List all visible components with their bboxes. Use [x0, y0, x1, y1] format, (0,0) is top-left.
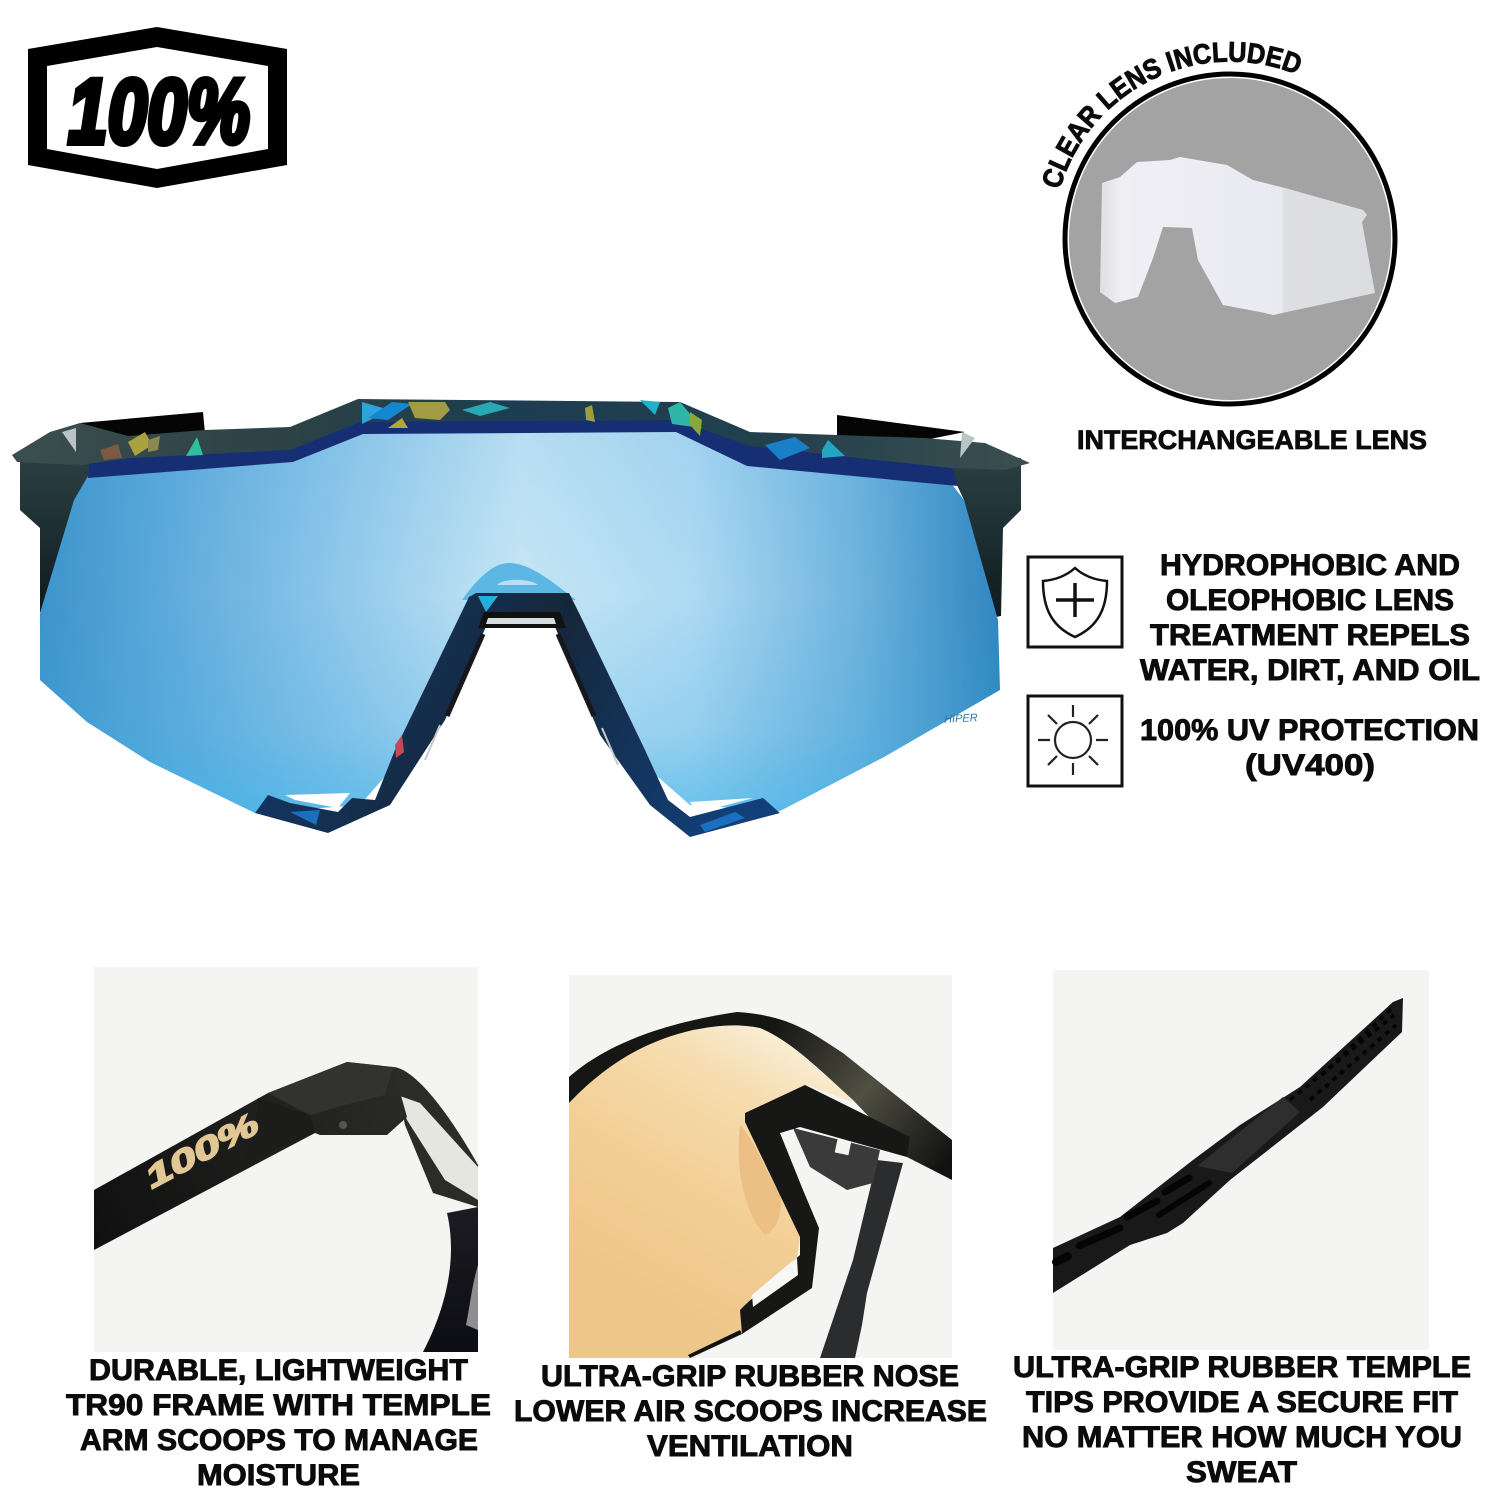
logo: 100% badge [28, 27, 287, 188]
label: interchangeable lens: INTERCHANGEABLE LENS [1077, 425, 1427, 455]
caption: nose: LOWER AIR SCOOPS INCREASE [514, 1395, 987, 1428]
icon: shield with plus [1028, 557, 1122, 647]
nose frame [740, 1085, 910, 1334]
clear lens shape [1100, 157, 1375, 315]
text: lens treatment: TREATMENT REPELS [1150, 619, 1470, 652]
text: uv protection [1140, 714, 1479, 782]
arm logo: 100% [139, 1106, 265, 1195]
text: lens treatment [1140, 549, 1480, 687]
nose piece [255, 593, 780, 837]
caption: frame: MOISTURE [197, 1459, 360, 1492]
top frame [569, 1012, 952, 1180]
caption: temple tips [1013, 1351, 1471, 1489]
caption: temple tips: ULTRA-GRIP RUBBER TEMPLE [1013, 1351, 1471, 1384]
hex grip pattern [1290, 1008, 1396, 1100]
temple arm [820, 1160, 903, 1358]
slots [1056, 1178, 1209, 1262]
icon: sun [1028, 696, 1122, 786]
caption: nose [514, 1360, 987, 1463]
panel: clear lens badge [1042, 42, 1398, 406]
caption: nose: VENTILATION [647, 1430, 853, 1463]
text: lens treatment: WATER, DIRT, AND OIL [1140, 654, 1480, 687]
brow bar [12, 399, 1030, 486]
caption: nose: ULTRA-GRIP RUBBER NOSE [541, 1360, 959, 1393]
sunglasses: main product image [12, 399, 1030, 837]
panel: nose detail photo [569, 975, 952, 1358]
text: lens treatment: HYDROPHOBIC AND [1160, 549, 1460, 582]
text: uv protection: 100% UV PROTECTION [1140, 714, 1479, 747]
caption: temple tips: NO MATTER HOW MUCH YOU [1022, 1421, 1462, 1454]
grip panel [1197, 1097, 1300, 1173]
temple tip [1053, 998, 1403, 1293]
lens rim [423, 1207, 478, 1352]
brow colour shards [362, 402, 390, 424]
lens mark: HIPER [944, 712, 978, 726]
gold lens [569, 1020, 860, 1358]
logo: 100% badge: 100% [68, 61, 250, 163]
panel: temple tip detail photo [1053, 970, 1429, 1350]
clear lens circle [1065, 74, 1395, 404]
right temple arm [945, 458, 1021, 618]
curved heading: CLEAR LENS INCLUDED [1042, 42, 1301, 188]
rubber nose pad [793, 1128, 880, 1190]
caption: frame: DURABLE, LIGHTWEIGHT [89, 1354, 468, 1387]
caption: frame [66, 1354, 491, 1492]
white slits on the nose feet [285, 793, 350, 808]
lens bridge highlight [462, 563, 576, 600]
black temple scoops [80, 412, 965, 445]
temple arm [94, 1062, 407, 1250]
caption: frame: TR90 FRAME WITH TEMPLE [66, 1389, 491, 1422]
caption: temple tips: TIPS PROVIDE A SECURE FIT [1026, 1386, 1458, 1419]
caption: frame: ARM SCOOPS TO MANAGE [80, 1424, 478, 1457]
text: lens treatment: OLEOPHOBIC LENS [1166, 584, 1454, 617]
left temple arm [20, 458, 95, 612]
text: uv protection: (UV400) [1245, 749, 1375, 782]
mirrored blue lens [40, 431, 1000, 813]
caption: temple tips: SWEAT [1186, 1456, 1297, 1489]
panel: frame detail photo [94, 967, 478, 1352]
